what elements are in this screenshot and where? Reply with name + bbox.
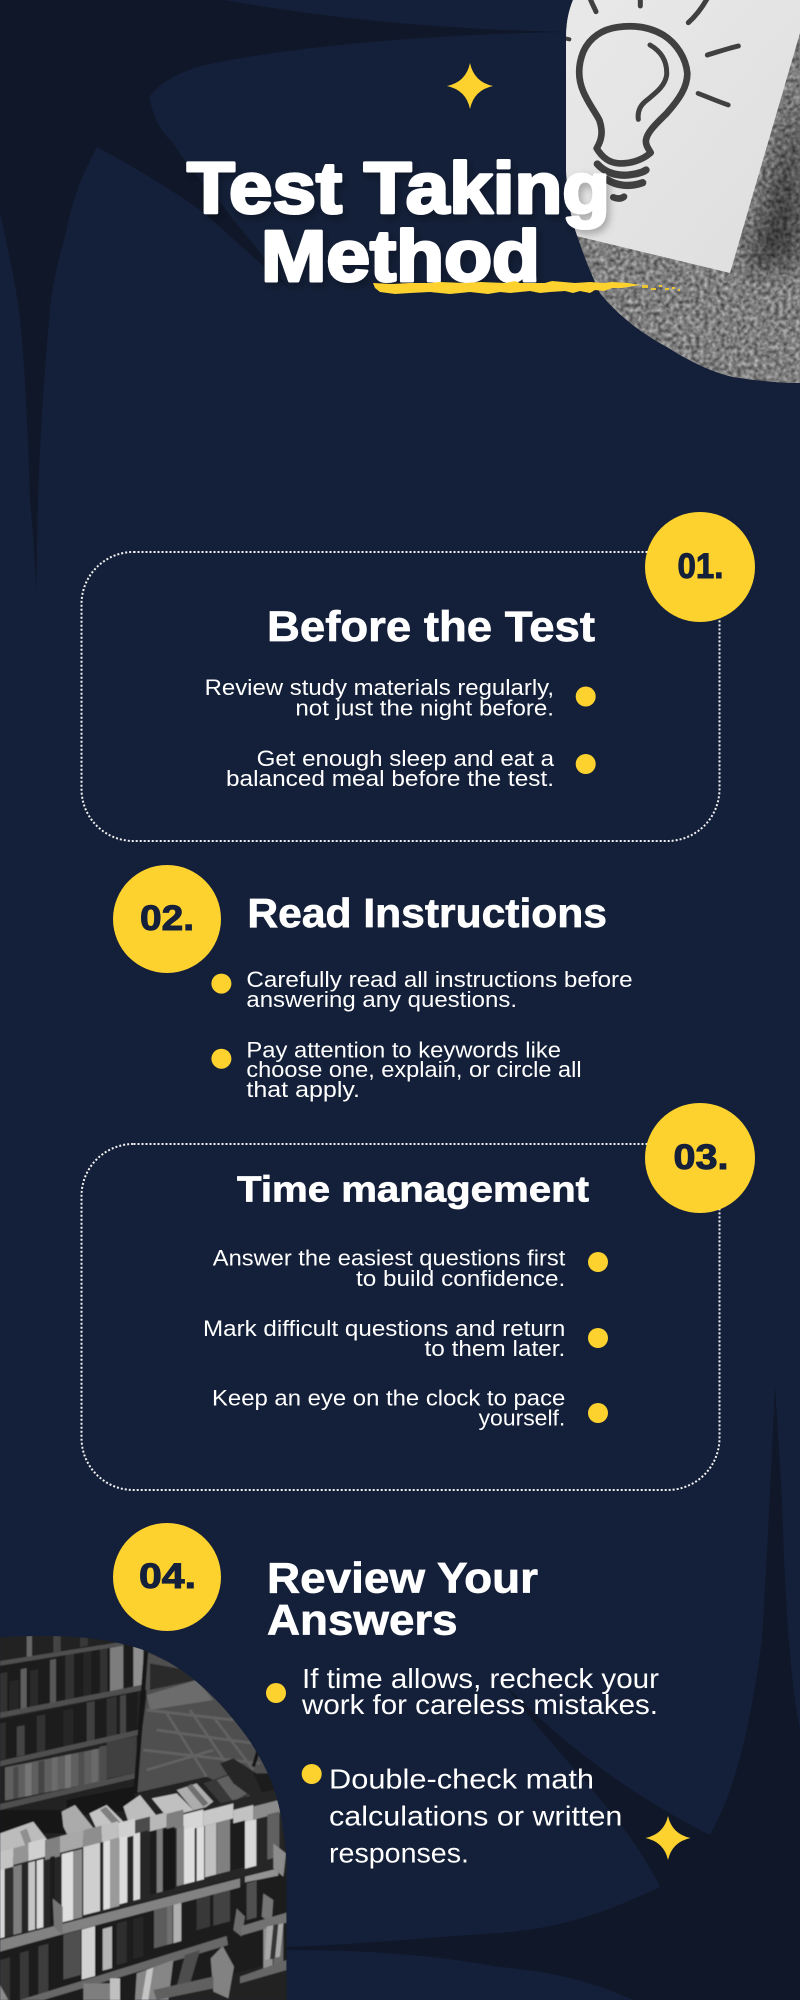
bullet 2 text: balanced meal before the test.	[226, 766, 554, 791]
heading: Before the Test	[267, 603, 595, 651]
panel: 04 review your answers	[113, 1523, 659, 1869]
bullet 1 text: to build confidence.	[356, 1266, 565, 1291]
bullet 2 text: Pay attention to keywords like	[246, 1038, 561, 1062]
bullet 1 text: Review study materials regularly,	[205, 675, 554, 700]
bullet 1 text: answering any questions.	[246, 987, 517, 1012]
bullet 1 text	[246, 967, 633, 1012]
card outline	[82, 552, 720, 841]
heading	[267, 1555, 538, 1645]
bullet 2 text: that apply.	[246, 1077, 360, 1102]
bullet 2 text: choose one, explain, or circle all	[246, 1057, 582, 1082]
bullet 1 text	[205, 675, 554, 720]
bullet 1 dot	[211, 974, 231, 994]
bullet 1 text: Answer the easiest questions first	[213, 1246, 566, 1271]
bullet 2 text: Double-check math	[329, 1764, 594, 1795]
bullet 1 text	[213, 1246, 566, 1291]
bullet 2 text	[226, 746, 555, 791]
panel: 02 read instructions	[113, 865, 633, 1102]
panel: 01 before the test	[82, 512, 755, 841]
bullet 3 dot	[588, 1403, 608, 1423]
bullet 2 text: calculations or written	[329, 1801, 622, 1832]
bullet 1 text	[301, 1663, 659, 1720]
card outline	[82, 1144, 720, 1490]
bullet 1 dot	[588, 1252, 608, 1272]
number badge 04	[113, 1523, 221, 1631]
bullet 1 dot	[576, 686, 596, 706]
title: Test Taking	[187, 149, 610, 229]
background shape: bottom-right dark folds	[286, 1385, 800, 2000]
decorative star: top	[447, 63, 493, 109]
underline speckle	[642, 285, 680, 291]
photo: lightbulb note on cork board	[560, 0, 800, 385]
number badge 03: 03.	[674, 1138, 728, 1177]
title	[187, 149, 610, 297]
front shelf board	[0, 1878, 240, 1952]
number badge 02: 02.	[140, 899, 194, 938]
background shape: top-left dark folds	[0, 0, 567, 590]
bullet 3 text	[212, 1386, 565, 1431]
bullet 3 text: yourself.	[479, 1406, 565, 1431]
photo: library bookshelves	[0, 1608, 290, 2000]
bullet 1 text: If time allows, recheck your	[302, 1663, 659, 1694]
bullet 2 text: Get enough sleep and eat a	[257, 746, 555, 771]
bullet 3 text: Keep an eye on the clock to pace	[212, 1386, 565, 1411]
number badge 04: 04.	[139, 1557, 196, 1596]
bullet 2 text: responses.	[329, 1838, 469, 1869]
bullet 2 dot	[302, 1764, 322, 1784]
shelves upper rows	[0, 1636, 144, 1801]
bullet 2 text: Mark difficult questions and return	[203, 1316, 565, 1341]
bullet 1 text: not just the night before.	[295, 696, 554, 720]
title: Method	[261, 217, 540, 297]
second shelf board	[20, 1936, 228, 2000]
lower dark row	[0, 1869, 287, 2000]
bullet 1 text: Carefully read all instructions before	[246, 967, 633, 992]
bullet 2 text	[246, 1038, 582, 1102]
bullet 2 text	[203, 1316, 565, 1361]
panel: 03 time management	[82, 1103, 755, 1490]
number badge 01	[645, 512, 755, 622]
bullet 1 dot	[266, 1683, 286, 1703]
stacked back books	[0, 1820, 48, 1856]
floor	[137, 1650, 268, 1797]
bullet 2 dot	[588, 1328, 608, 1348]
number badge 02	[113, 865, 221, 973]
bullet 2 text	[329, 1764, 622, 1869]
title brush underline	[373, 281, 640, 294]
number badge 03	[645, 1103, 755, 1213]
heading: Read Instructions	[247, 890, 607, 936]
shelf boards	[0, 1642, 147, 1810]
front row spines and tops	[0, 1777, 283, 1938]
bullet 2 dot	[576, 754, 596, 774]
heading: Time management	[237, 1169, 589, 1210]
number badge 01: 01.	[678, 547, 724, 586]
bullet 2 text: to them later.	[424, 1336, 565, 1361]
decorative star: bottom	[646, 1816, 690, 1860]
bullet 2 dot	[211, 1049, 231, 1069]
heading: Review Your	[267, 1555, 538, 1603]
heading: Answers	[267, 1597, 458, 1645]
bullet 1 text: work for careless mistakes.	[301, 1689, 658, 1720]
